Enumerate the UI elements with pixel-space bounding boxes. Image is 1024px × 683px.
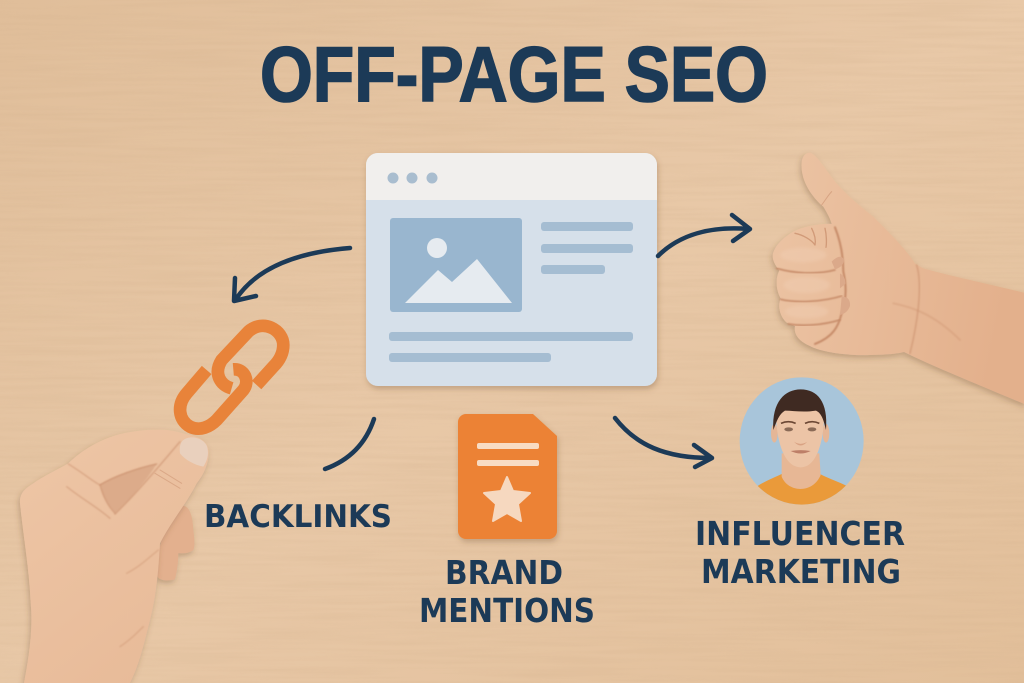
fingers behind — [157, 506, 194, 581]
knuckle highlights — [780, 248, 830, 318]
label: brand mentions — [419, 553, 595, 630]
label: backlinks: BACKLINKS — [204, 499, 392, 535]
text lines — [389, 222, 633, 362]
hand holding chain — [20, 430, 209, 683]
browser window illustration — [366, 153, 657, 386]
hand shape — [20, 430, 209, 683]
thumbnail — [180, 437, 208, 467]
finger gap — [100, 464, 157, 513]
window control dots — [388, 172, 438, 184]
title: OFF-PAGE SEO — [260, 30, 768, 118]
influencer portrait — [740, 377, 864, 510]
label: influencer marketing: INFLUENCER — [695, 514, 905, 553]
arc to brand mentions — [325, 419, 374, 469]
arrow to thumbs up — [658, 215, 750, 256]
hand shading — [777, 192, 960, 353]
index and thumb crease — [67, 442, 182, 647]
arrow to influencer — [615, 418, 712, 467]
browser title bar — [366, 153, 657, 200]
icon: orange chain link — [180, 326, 283, 429]
label: brand mentions: MENTIONS — [419, 591, 595, 630]
icon: brand mentions document — [458, 414, 557, 539]
label: influencer marketing — [695, 514, 905, 591]
image placeholder — [390, 218, 522, 312]
label: influencer marketing: MARKETING — [701, 552, 901, 591]
hand shape — [773, 153, 1024, 405]
label: brand mentions: BRAND — [445, 553, 563, 592]
arrow to backlinks — [234, 248, 350, 301]
thumbs-up hand — [773, 153, 1024, 405]
